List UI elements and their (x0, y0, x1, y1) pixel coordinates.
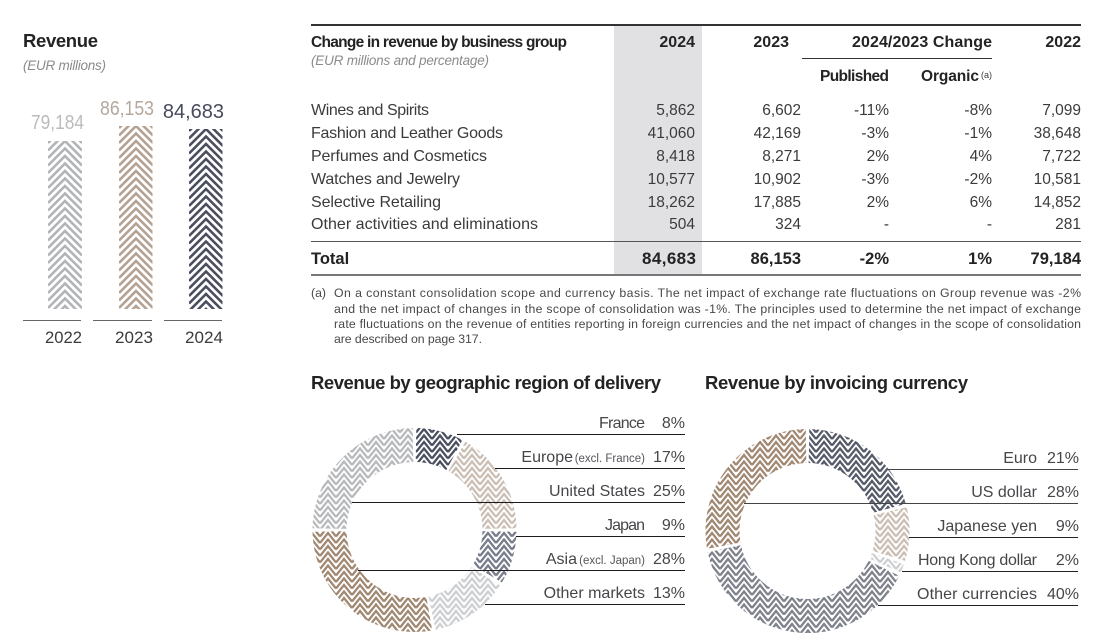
row: Watches and Jewelry: 10,902 (754, 171, 801, 188)
column headers: (a) (981, 70, 992, 80)
row: Total: 1% (968, 250, 992, 268)
row: Other activities and eliminations: - (884, 216, 889, 233)
bar 2022 (23, 112, 84, 347)
row: Other activities and eliminations: 281 (1055, 216, 1081, 233)
column headers: 2024/2023 Change (852, 34, 992, 51)
bar 2023: 2023 (115, 328, 153, 347)
column headers: 2022 (1045, 34, 1081, 51)
row: Perfumes and Cosmetics: 8,418 (656, 148, 695, 165)
legend row: Asia: (excl. Japan) (579, 555, 645, 567)
footnote: On a constant consolidation scope and currency basis. The net impact of exchange rate fluctuations on Group revenue was -2% (334, 286, 1081, 300)
row: Selective Retailing: 18,262 (648, 194, 695, 211)
footnote (311, 286, 1081, 346)
legend row: Asia: Asia (546, 551, 577, 568)
panel: change in revenue table (311, 24, 1082, 276)
bar 2024: 84,683 (163, 101, 224, 123)
row: Wines and Spirits (311, 102, 1081, 119)
row: Perfumes and Cosmetics (311, 148, 1081, 165)
column headers: 2024 (659, 34, 695, 51)
legend row: Japan (516, 517, 685, 537)
legend row: Europe: 17% (653, 449, 685, 466)
donut chart: geographic region (330, 415, 685, 615)
row: Fashion and Leather Goods: 42,169 (754, 125, 801, 142)
footnote: and the net impact of changes in the scope of consolidation was -1%. The principles used to determine the net impact of exchange (334, 302, 1081, 316)
row: Total: 79,184 (1031, 250, 1082, 268)
legend row: Euro: Euro (1003, 450, 1037, 467)
row: Other activities and eliminations: 324 (775, 216, 801, 233)
row: Perfumes and Cosmetics: Perfumes and Cosmetics (311, 148, 487, 165)
legend row: France: 8% (662, 415, 685, 432)
row: Fashion and Leather Goods: Fashion and Leather Goods (311, 125, 503, 142)
legend row: Euro (888, 450, 1079, 470)
footnote: are described on page 317. (334, 332, 482, 346)
bar 2023: 86,153 (100, 98, 154, 120)
bar 2022: 2022 (45, 328, 82, 347)
legend row: US dollar: 28% (1047, 484, 1079, 501)
legend row: Asia: 28% (653, 551, 685, 568)
row: Fashion and Leather Goods: 41,060 (648, 125, 695, 142)
row: Fashion and Leather Goods: -3% (861, 125, 889, 142)
legend row: Other currencies (878, 586, 1079, 606)
subheading: EUR millions: (EUR millions) (23, 58, 106, 73)
highlighted 2024 column (614, 26, 702, 275)
row: Other activities and eliminations: 504 (669, 216, 695, 233)
segment: Hong Kong dollar (885, 559, 888, 566)
legend row: Other markets (485, 585, 685, 605)
segment: Other currencies (724, 549, 884, 616)
column headers: Organic (921, 68, 979, 85)
row: Total (311, 249, 1082, 268)
legend row: Asia (358, 551, 685, 571)
row: Total: 84,683 (642, 249, 696, 268)
legend row: Other currencies: Other currencies (917, 586, 1037, 603)
legend row: Other markets: Other markets (544, 585, 645, 602)
legend row: United States: 25% (653, 483, 685, 500)
bar 2022: 79,184 (31, 112, 84, 134)
donut chart: invoicing currency (722, 446, 1079, 616)
row: Wines and Spirits: 5,862 (656, 102, 695, 119)
legend row: Europe: (excl. France) (575, 453, 645, 465)
row: Other activities and eliminations: Other activities and eliminations (311, 216, 538, 233)
column headers: Published (820, 68, 889, 85)
row: Watches and Jewelry: Watches and Jewelry (311, 171, 460, 188)
row: Fashion and Leather Goods: 38,648 (1034, 125, 1081, 142)
legend row: Japan: 9% (662, 517, 685, 534)
row: Perfumes and Cosmetics: 8,271 (762, 148, 801, 165)
legend row: Euro: 21% (1047, 450, 1079, 467)
row: Wines and Spirits: -8% (964, 102, 992, 119)
heading: geographic region: Revenue by geographic region of delivery (311, 372, 662, 393)
segment: Asia (330, 531, 429, 615)
legend row: United States (352, 483, 685, 503)
footnote: (a) (311, 286, 326, 300)
legend row: Hong Kong dollar: 2% (1056, 552, 1079, 569)
legend row: Europe (495, 449, 685, 469)
segment: Japan (487, 531, 499, 574)
bar 2023 (93, 98, 154, 347)
heading: invoicing currency: Revenue by invoicing currency (705, 372, 969, 393)
legend row: Other markets: 13% (653, 585, 685, 602)
segment: US dollar (722, 446, 806, 546)
row: Selective Retailing: 14,852 (1034, 194, 1081, 211)
legend row: US dollar (744, 484, 1079, 504)
row: Other activities and eliminations (311, 216, 1081, 233)
table subheading: (EUR millions and percentage) (311, 53, 489, 68)
row: Selective Retailing: 17,885 (754, 194, 801, 211)
row: Watches and Jewelry: 10,581 (1034, 171, 1081, 188)
row: Total: 86,153 (751, 250, 801, 268)
segment: Euro (809, 446, 889, 508)
row: Fashion and Leather Goods (311, 125, 1081, 142)
row: Perfumes and Cosmetics: 4% (970, 148, 992, 165)
column headers (659, 34, 1081, 85)
legend row: US dollar: US dollar (971, 484, 1038, 501)
segment: Japanese yen (889, 511, 893, 556)
row: Other activities and eliminations: - (987, 216, 992, 233)
row: Selective Retailing: 6% (970, 194, 992, 211)
row: Wines and Spirits: -11% (854, 102, 889, 119)
row: Fashion and Leather Goods: -1% (964, 125, 992, 142)
bar 2024 (163, 101, 224, 347)
row: Wines and Spirits: 7,099 (1042, 102, 1081, 119)
segment: Europe (457, 456, 499, 529)
bar 2024: 2024 (185, 328, 223, 347)
segment: France (416, 445, 454, 455)
row: Watches and Jewelry: 10,577 (648, 171, 695, 188)
legend row: France: France (599, 415, 645, 432)
legend row: Hong Kong dollar: Hong Kong dollar (918, 552, 1038, 569)
row: Perfumes and Cosmetics: 2% (867, 148, 889, 165)
legend row: Hong Kong dollar (902, 552, 1079, 572)
heading: Revenue: Revenue (23, 30, 98, 51)
row: Watches and Jewelry (311, 171, 1081, 188)
legend row: Europe: Europe (521, 449, 573, 466)
segment: Other markets (432, 576, 486, 613)
row: Selective Retailing (311, 194, 1081, 211)
table heading: Change in revenue by business group (311, 34, 567, 51)
panel: revenue bar chart (23, 30, 224, 347)
segment: United States (330, 445, 413, 529)
row: Selective Retailing: 2% (867, 194, 889, 211)
row: Wines and Spirits: Wines and Spirits (311, 102, 429, 119)
legend row: United States: United States (549, 483, 645, 500)
legend row: Japanese yen: Japanese yen (937, 518, 1037, 535)
legend row: Japanese yen (909, 518, 1079, 538)
row: Wines and Spirits: 6,602 (762, 102, 801, 119)
row: Total: Total (311, 250, 349, 268)
row: Watches and Jewelry: -2% (964, 171, 992, 188)
row: Total: -2% (860, 250, 889, 268)
row: Perfumes and Cosmetics: 7,722 (1042, 148, 1081, 165)
column headers: 2023 (753, 34, 789, 51)
footnote: rate fluctuations on the revenue of entities reporting in foreign currencies and the net impact of changes in the scope of consolidation (334, 317, 1081, 331)
row: Selective Retailing: Selective Retailing (311, 194, 441, 211)
legend row: Other currencies: 40% (1047, 586, 1079, 603)
legend row: Japanese yen: 9% (1056, 518, 1079, 535)
legend row: France (457, 415, 685, 435)
legend row: Japan: Japan (605, 517, 645, 534)
row: Watches and Jewelry: -3% (861, 171, 889, 188)
